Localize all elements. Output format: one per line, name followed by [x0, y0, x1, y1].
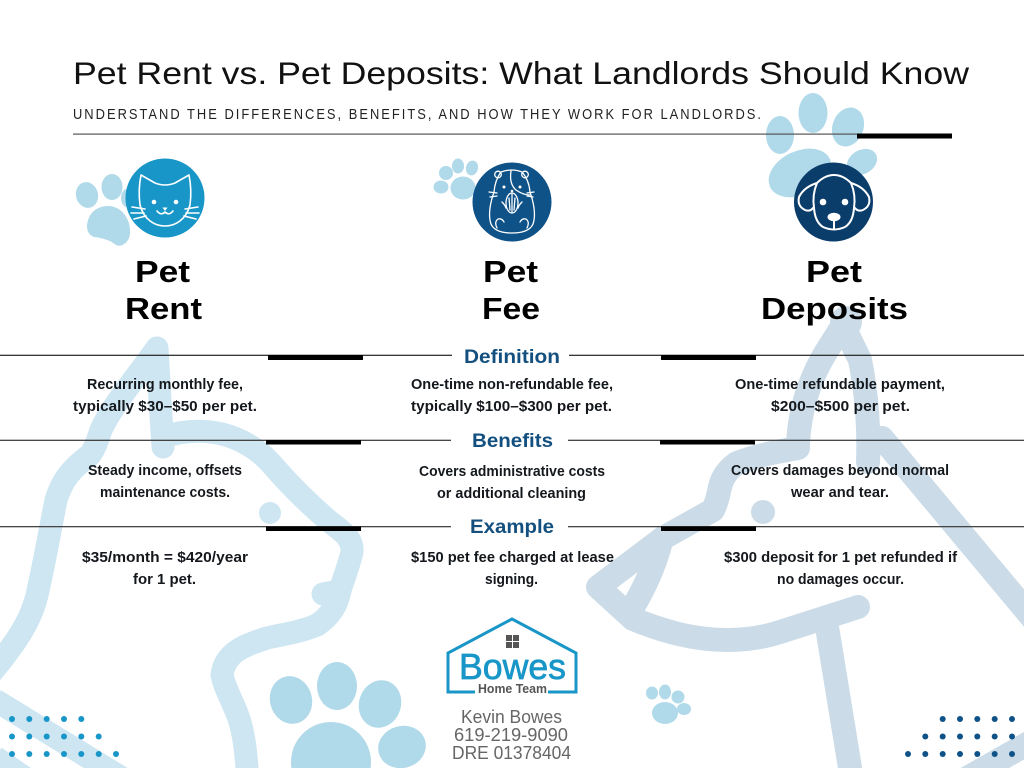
panel: pet fee column [411, 158, 614, 588]
text: deposits benefits: Covers damages beyond normal [731, 463, 949, 479]
dot grid: bottom left [9, 716, 119, 757]
text: fee benefits [419, 464, 605, 502]
text: deposits benefits: wear and tear. [790, 485, 889, 501]
text: fee example [411, 550, 614, 588]
section label: definition: Definition [464, 347, 560, 368]
contact details: DRE 01378404 [452, 743, 571, 763]
text: fee benefits: or additional cleaning [437, 486, 586, 502]
text: fee definition [411, 377, 613, 415]
text: rent definition [73, 377, 257, 415]
text: rent definition: typically $30–$50 per pet. [73, 399, 257, 415]
logo: bowes home team: Bowes [459, 646, 566, 687]
text: rent example: $35/month = $420/year [82, 550, 248, 566]
decorative paw: behind dog icon [761, 93, 882, 207]
logo: bowes home team: Home Team [478, 681, 547, 696]
heading: pet rent [125, 254, 202, 326]
text: deposits definition: $200–$500 per pet. [771, 399, 910, 415]
panel: pet rent column [73, 158, 257, 588]
text: deposits benefits [731, 463, 949, 501]
contact details: Kevin Bowes [461, 707, 562, 727]
background: dog silhouette [598, 306, 1024, 768]
text: deposits definition [735, 377, 945, 415]
background: cat silhouette [0, 348, 352, 768]
text: rent definition: Recurring monthly fee, [87, 377, 243, 393]
heading: pet deposits: Deposits [761, 291, 908, 326]
icon: hamster [472, 162, 552, 242]
text: fee definition: One-time non-refundable fee, [411, 377, 613, 393]
heading: pet fee: Fee [482, 291, 540, 326]
text: rent example [82, 550, 248, 588]
icon: cat [126, 158, 204, 238]
heading: pet deposits [761, 254, 908, 326]
section label: benefits: Benefits [472, 431, 553, 452]
title: Pet Rent vs. Pet Deposits: What Landlords Should Know [73, 55, 969, 91]
logo: bowes home team [448, 619, 576, 696]
text: deposits example: $300 deposit for 1 pet refunded if [724, 550, 957, 566]
contact details [452, 707, 571, 763]
text: fee benefits: Covers administrative costs [419, 464, 605, 480]
contact details: 619-219-9090 [454, 725, 568, 745]
panel: pet deposits column [724, 162, 957, 588]
text: fee definition: typically $100–$300 per pet. [411, 399, 612, 415]
text: rent benefits [88, 463, 242, 501]
text: fee example: signing. [485, 572, 538, 588]
section label: example: Example [470, 517, 554, 538]
text: rent benefits: Steady income, offsets [88, 463, 242, 479]
heading: pet rent: Pet [135, 254, 190, 289]
heading: pet rent: Rent [125, 291, 202, 326]
text: deposits definition: One-time refundable payment, [735, 377, 945, 393]
decorative paw: bottom centre small [646, 684, 691, 724]
decorative paw: bottom centre large [265, 662, 431, 768]
text: fee example: $150 pet fee charged at lease [411, 550, 614, 566]
text: deposits example [724, 550, 957, 588]
icon: cat paw [73, 174, 133, 246]
text: rent example: for 1 pet. [133, 572, 196, 588]
dot grid: bottom right [905, 716, 1015, 757]
heading: pet fee: Pet [483, 254, 538, 289]
icon: dog [794, 162, 873, 242]
heading: pet deposits: Pet [806, 254, 862, 289]
subtitle: UNDERSTAND THE DIFFERENCES, BENEFITS, AND HOW THEY WORK FOR LANDLORDS. [73, 105, 761, 122]
text: rent benefits: maintenance costs. [100, 485, 230, 501]
icon: hamster paw [434, 158, 480, 200]
heading: pet fee [482, 254, 540, 326]
text: deposits example: no damages occur. [777, 572, 904, 588]
